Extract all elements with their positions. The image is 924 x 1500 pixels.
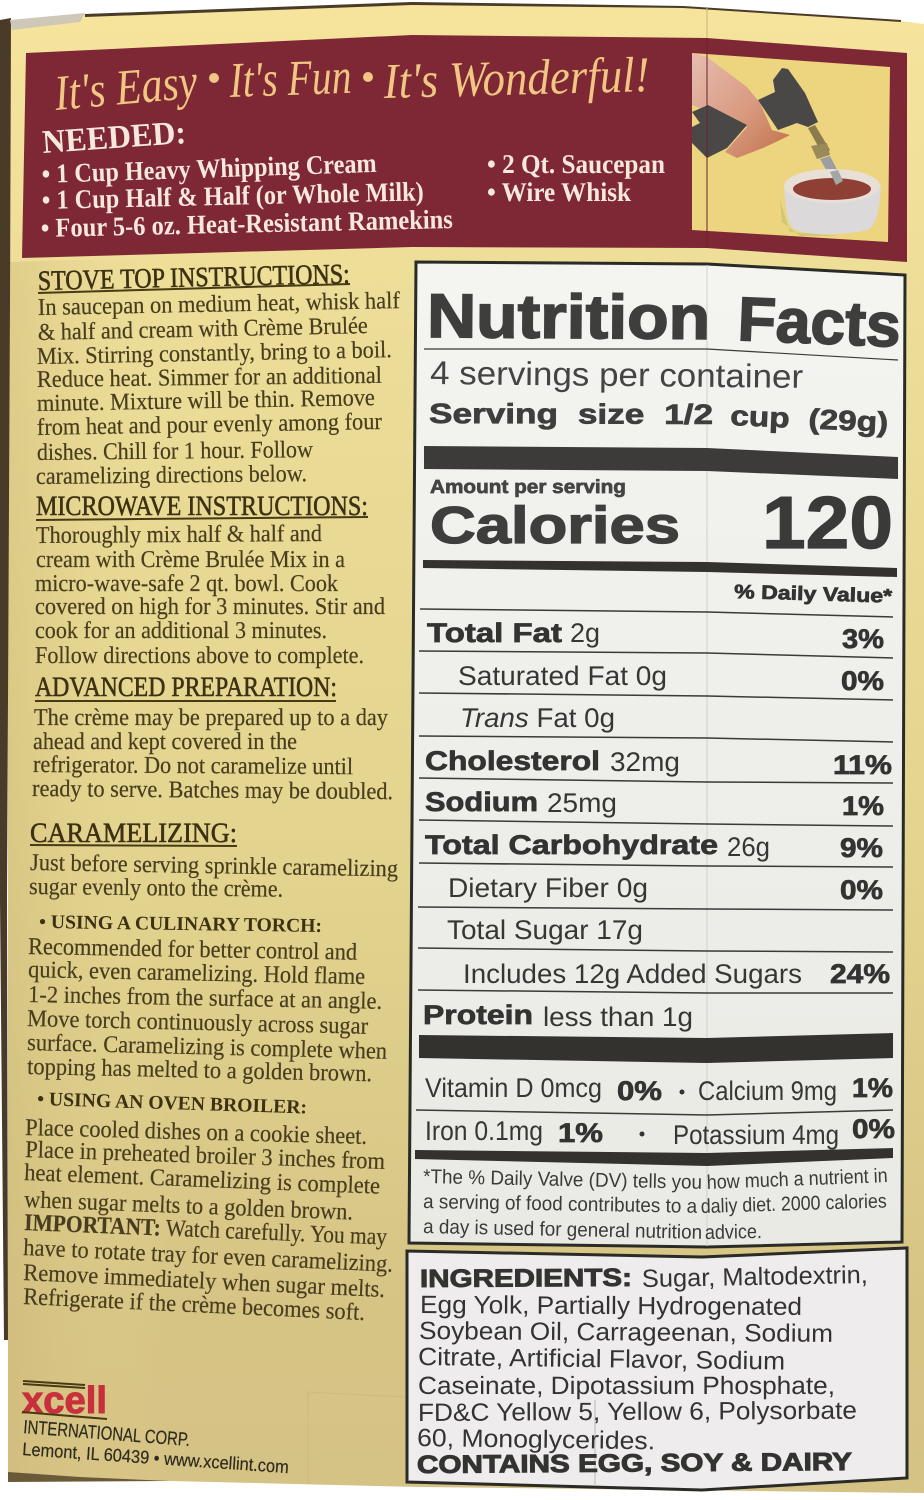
nutrient rows: Protein [423, 1000, 533, 1030]
vitamins and minerals: Potassium 4mg [673, 1120, 839, 1150]
nutrient rows: Cholesterol [425, 746, 600, 776]
daily value header: % Daily Value* [734, 581, 893, 608]
panel: xcell logo and address: xcell [22, 1380, 107, 1422]
panel: xcell logo and address: Lemont, IL 60439 • www.xcellint.com [22, 1439, 289, 1477]
needed list: • 2 Qt. Saucepan [487, 149, 665, 179]
needed list: • 1 Cup Half & Half (or Whole Milk) [41, 176, 424, 215]
text: stove top steps: In saucepan on medium heat, whisk half [38, 288, 400, 321]
text: oven broiler directions: Refrigerate if the crème becomes soft. [23, 1284, 366, 1326]
nutrition title: Nutrition [427, 282, 710, 353]
text: oven broiler directions: • USING AN OVEN BROILER: [37, 1089, 307, 1118]
ingredients text: 60, Monoglycerides. [417, 1424, 655, 1455]
nutrient rows: less than 1g [543, 1002, 693, 1032]
footnote [423, 1165, 888, 1244]
text: culinary torch directions: Move torch continuously across sugar [27, 1006, 368, 1040]
text: oven broiler directions: Place cooled dishes on a cookie sheet. [25, 1115, 367, 1150]
text: caramelizing intro: sugar evenly onto the crème. [29, 874, 283, 903]
nutrient rows: 9% [840, 833, 883, 863]
panel: preparation instructions [23, 259, 400, 1326]
nutrient rows: 26g [727, 832, 770, 862]
nutrient rows: 25mg [547, 788, 617, 818]
banner headline: It's Fun [228, 48, 352, 108]
calories [430, 477, 893, 564]
ingredients text: FD&C Yellow 5, Yellow 6, Polysorbate [418, 1397, 857, 1427]
text: microwave steps: covered on high for 3 minutes. Stir and [35, 594, 385, 620]
text: culinary torch directions: surface. Caramelizing is complete when [27, 1030, 387, 1065]
text: oven broiler directions: Place in preheated broiler 3 inches from [25, 1137, 386, 1175]
vitamins and minerals: Calcium 9mg [698, 1076, 837, 1106]
panel: nutrition facts [409, 262, 905, 1247]
servings: Serving size 1/2 [429, 398, 713, 430]
text: caramelizing intro [29, 850, 398, 903]
text: culinary torch directions: Recommended for better control and [28, 934, 357, 966]
vitamins and minerals: Iron 0.1mg [425, 1116, 543, 1146]
vitamins and minerals: Vitamin D 0mcg [425, 1073, 602, 1103]
nutrition title: Facts [736, 285, 902, 361]
nutrient rows: Total Fat [427, 618, 562, 648]
banner headline: It's Wonderful! [382, 46, 650, 109]
icon: torch over ramekin [692, 53, 890, 242]
panel: xcell logo and address [22, 1380, 289, 1477]
allergen statement: CONTAINS EGG, SOY & DAIRY [417, 1448, 852, 1479]
text: microwave steps: Follow directions above to complete. [35, 643, 364, 669]
vitamins and minerals: 1% [558, 1118, 603, 1148]
text: advanced preparation notes: refrigerator. Do not caramelize until [33, 752, 353, 780]
ingredients text: INGREDIENTS: [420, 1264, 632, 1293]
text: culinary torch directions: • USING A CULINARY TORCH: [39, 912, 322, 937]
nutrient rows: 11% [833, 750, 892, 780]
nutrient rows: Total Carbohydrate [425, 830, 718, 860]
text: advanced preparation notes: ahead and kept covered in the [33, 729, 297, 755]
calories: Amount per serving [430, 477, 626, 498]
nutrient rows: Trans Fat 0g [460, 703, 615, 733]
needed list: NEEDED: [41, 115, 187, 161]
heading: advanced preparation: ADVANCED PREPARATION: [35, 672, 337, 703]
text: stove top steps: & half and cream with Crème Brulée [38, 313, 368, 346]
text: culinary torch directions [27, 912, 387, 1087]
vitamins and minerals: 0% [852, 1114, 895, 1144]
calories: 120 [762, 481, 893, 564]
text: stove top steps: caramelizing directions below. [36, 461, 307, 490]
ingredients text: Sugar, Maltodextrin, [642, 1261, 868, 1293]
text: stove top steps: from heat and pour evenly among four [37, 409, 382, 441]
text: microwave steps: cream with Crème Brulée Mix in a [36, 547, 345, 573]
text: culinary torch directions: quick, even caramelizing. Hold flame [28, 957, 365, 990]
banner headline: It's Easy [51, 53, 200, 121]
servings [429, 354, 889, 438]
panel: xcell logo and address: INTERNATIONAL CORP. [23, 1417, 191, 1451]
text: stove top steps: minute. Mixture will be thin. Remove [37, 385, 375, 417]
nutrient rows: 3% [842, 624, 884, 654]
footnote: *The % Daily Valve (DV) tells you [423, 1166, 702, 1194]
vitamins and minerals: 0% [617, 1076, 662, 1106]
text: culinary torch directions: topping has melted to a golden brown. [27, 1054, 372, 1087]
panel: ingredients [407, 1248, 907, 1490]
nutrient rows: 1% [842, 791, 884, 821]
text: stove top steps: dishes. Chill for 1 hour. Follow [37, 437, 314, 466]
footnote: daliy diet. 2000 calories [700, 1190, 887, 1218]
ingredients text [417, 1261, 868, 1455]
calories: Calories [430, 497, 680, 555]
nutrient rows: 24% [830, 959, 890, 989]
text: microwave steps [35, 521, 385, 669]
nutrient rows: 32mg [610, 747, 680, 777]
nutrient rows: Includes 12g Added Sugars [463, 959, 802, 989]
text: advanced preparation notes [32, 705, 393, 805]
servings: cup (29g) [730, 400, 889, 438]
nutrient rows: Saturated Fat 0g [458, 661, 667, 691]
servings: 4 servings per container [430, 354, 803, 395]
heading: microwave instructions: MICROWAVE INSTRUCTIONS: [36, 491, 368, 522]
footnote: how much a nutrient in [706, 1165, 888, 1194]
ingredients text: Citrate, Artificial Flavor, Sodium [418, 1343, 785, 1375]
footnote: a serving of food contributes to a [423, 1191, 698, 1218]
vitamins and minerals: 1% [852, 1073, 893, 1103]
text: culinary torch directions: 1-2 inches from the surface at an angle. [28, 982, 382, 1015]
text: microwave steps: cook for an additional 3 minutes. [35, 618, 327, 644]
footnote: advice. [705, 1221, 762, 1244]
text: oven broiler directions: heat element. Caramelizing is complete [24, 1160, 381, 1200]
text: advanced preparation notes: The crème may be prepared up to a day [34, 705, 388, 731]
nutrient rows: 2g [570, 618, 600, 648]
text: stove top steps: Reduce heat. Simmer for an additional [37, 363, 382, 393]
text: advanced preparation notes: ready to serve. Batches may be doubled. [32, 776, 393, 805]
footnote: a day is used for general nutrition [423, 1216, 702, 1244]
text: oven broiler directions: have to rotate tray for even caramelizing. [23, 1235, 394, 1278]
nutrient rows: Total Sugar 17g [447, 915, 643, 945]
needed list: • Four 5-6 oz. Heat-Resistant Ramekins [40, 204, 453, 243]
vitamins and minerals [415, 1073, 895, 1166]
needed list: • Wire Whisk [487, 177, 631, 207]
needed list: • 1 Cup Heavy Whipping Cream [41, 148, 377, 189]
ingredients text: Egg Yolk, Partially Hydrogenated [420, 1291, 802, 1321]
text: microwave steps: micro-wave-safe 2 qt. bowl. Cook [35, 571, 338, 597]
heading: caramelizing: CARAMELIZING: [30, 818, 237, 849]
needed list [40, 115, 665, 243]
nutrient rows: 0% [841, 666, 884, 696]
text: stove top steps: Mix. Stirring constantly, bring to a boil. [37, 337, 392, 370]
ingredients text: Caseinate, Dipotassium Phosphate, [418, 1372, 835, 1400]
banner headline [51, 46, 650, 121]
text: stove top steps [36, 288, 400, 490]
text: caramelizing intro: Just before serving sprinkle caramelizing [30, 850, 398, 882]
nutrient rows: Dietary Fiber 0g [448, 873, 648, 903]
nutrient rows [418, 609, 893, 1032]
text: microwave steps: Thoroughly mix half & half and [36, 521, 322, 549]
panel: needed banner [22, 35, 907, 262]
text: oven broiler directions [23, 1089, 394, 1326]
nutrient rows: Sodium [425, 787, 538, 817]
ingredients text: Soybean Oil, Carrageenan, Sodium [419, 1317, 833, 1348]
text: oven broiler directions: when sugar melts to a golden brown. [24, 1187, 354, 1226]
heading: stove top instructions: STOVE TOP INSTRUCTIONS: [37, 259, 350, 297]
nutrient rows: 0% [840, 875, 883, 905]
nutrition title [424, 282, 902, 361]
text: oven broiler directions: IMPORTANT: Watch carefully. You may [24, 1210, 388, 1251]
text: oven broiler directions: Remove immediately when sugar melts. [23, 1260, 386, 1303]
